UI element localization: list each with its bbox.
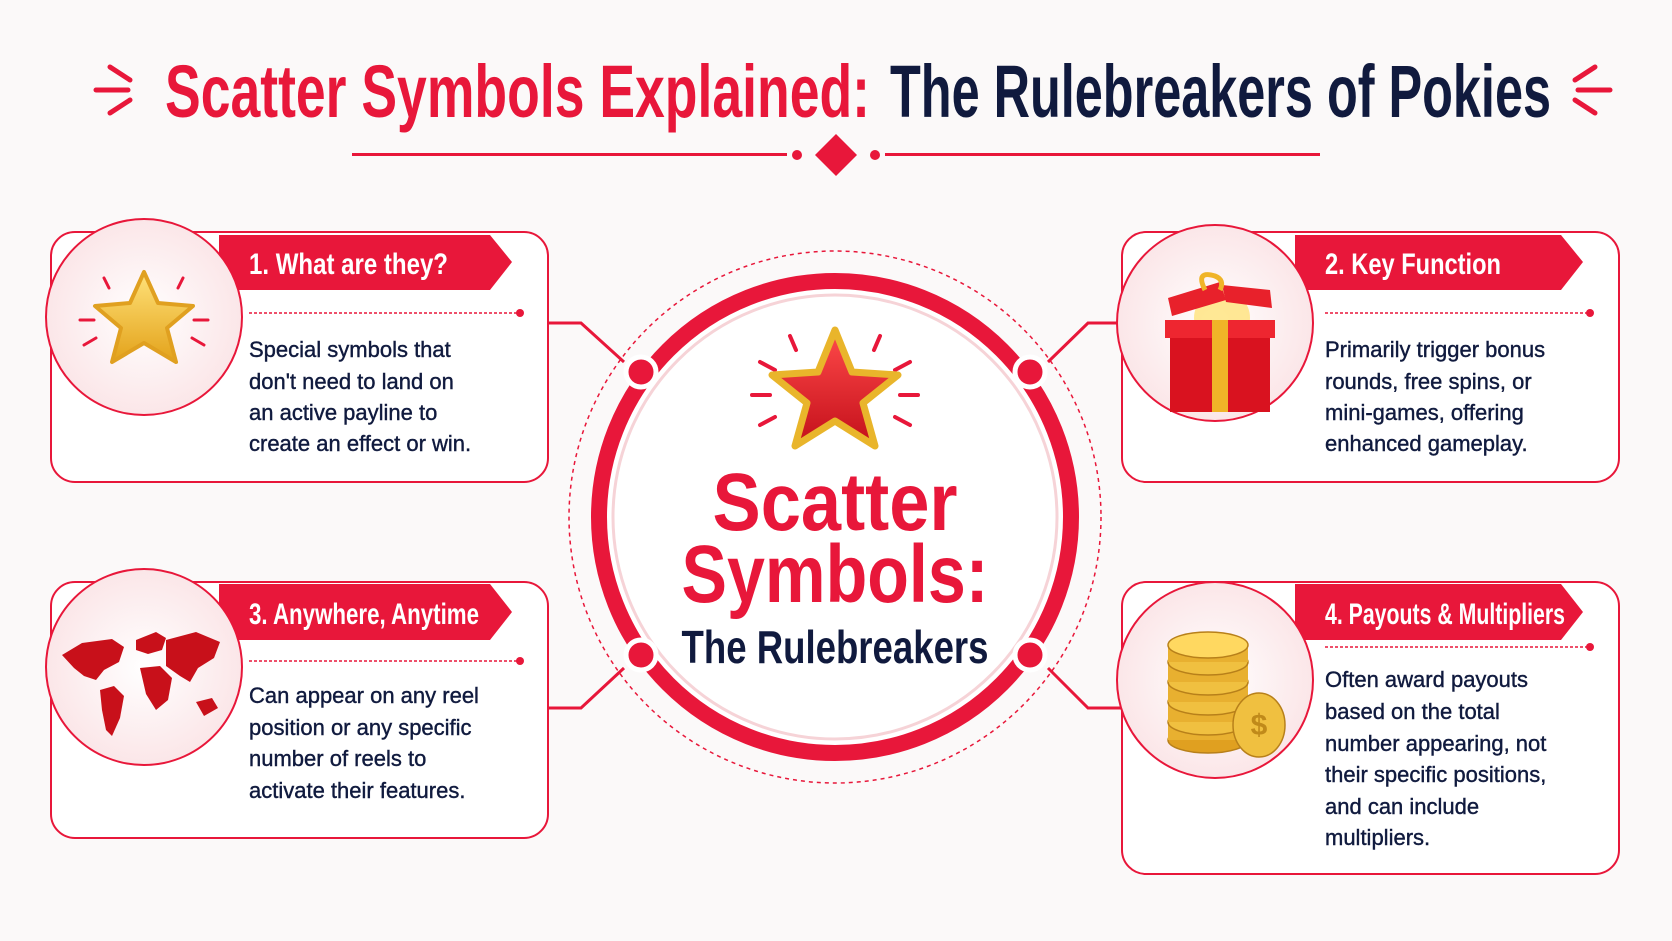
icon: gold star xyxy=(80,272,208,362)
panel: 1 what are they: 1. What are they? xyxy=(249,248,448,281)
panel: 2 key function: Primarily trigger bonus xyxy=(1325,337,1545,362)
panel: 4 payouts: their specific positions, xyxy=(1325,762,1546,787)
panel: 2 key function: mini-games, offering xyxy=(1325,400,1524,425)
body text: Special symbols that xyxy=(249,337,451,362)
panel: 2 key function: enhanced gameplay. xyxy=(1325,431,1528,456)
center text: Symbols: xyxy=(682,529,988,620)
icon: right burst xyxy=(1575,67,1610,113)
panel: 4 payouts: multipliers. xyxy=(1325,825,1430,850)
icon: coin stack: $ xyxy=(1251,709,1268,742)
center text xyxy=(682,457,988,673)
icon: coin stack xyxy=(1168,632,1285,757)
body text: an active payline to xyxy=(249,400,437,425)
icon: gift box xyxy=(1165,275,1275,412)
title divider ornament xyxy=(352,134,1320,176)
center hub xyxy=(569,251,1101,783)
header banner xyxy=(219,235,512,290)
connectors xyxy=(548,323,1122,708)
panel: 4 payouts: based on the total xyxy=(1325,699,1500,724)
panel: 2 key function: rounds, free spins, or xyxy=(1325,369,1532,394)
body text: create an effect or win. xyxy=(249,431,471,456)
panel: 3 anywhere anytime: position or any specific xyxy=(249,715,472,740)
panel: 4 payouts: and can include xyxy=(1325,794,1479,819)
panel: 2 key function: 2. Key Function xyxy=(1325,248,1501,281)
panel: 4 payouts xyxy=(1117,582,1619,874)
panel: 3 anywhere anytime: 3. Anywhere, Anytime xyxy=(249,598,479,631)
panel: 3 anywhere anytime: number of reels to xyxy=(249,746,426,771)
panel: 4 payouts: number appearing, not xyxy=(1325,731,1546,756)
icon: left burst xyxy=(96,67,130,113)
panel: 4 payouts: Often award payouts xyxy=(1325,667,1528,692)
icon: world map xyxy=(62,632,220,736)
center text: Scatter xyxy=(712,457,958,548)
panel: 3 anywhere anytime: Can appear on any reel xyxy=(249,683,479,708)
body text xyxy=(249,337,471,456)
panel: 2 key function xyxy=(1117,225,1619,482)
body text: don't need to land on xyxy=(249,369,454,394)
icon: red star xyxy=(752,330,918,446)
center text: The Rulebreakers xyxy=(682,621,988,673)
nodes xyxy=(626,357,1045,670)
panel: 1 what are they xyxy=(46,219,548,482)
panel: 4 payouts: 4. Payouts & Multipliers xyxy=(1325,598,1565,631)
panel: 3 anywhere anytime: activate their features. xyxy=(249,778,465,803)
panel: 3 anywhere anytime xyxy=(46,569,548,838)
title: Scatter Symbols Explained: xyxy=(165,50,870,133)
